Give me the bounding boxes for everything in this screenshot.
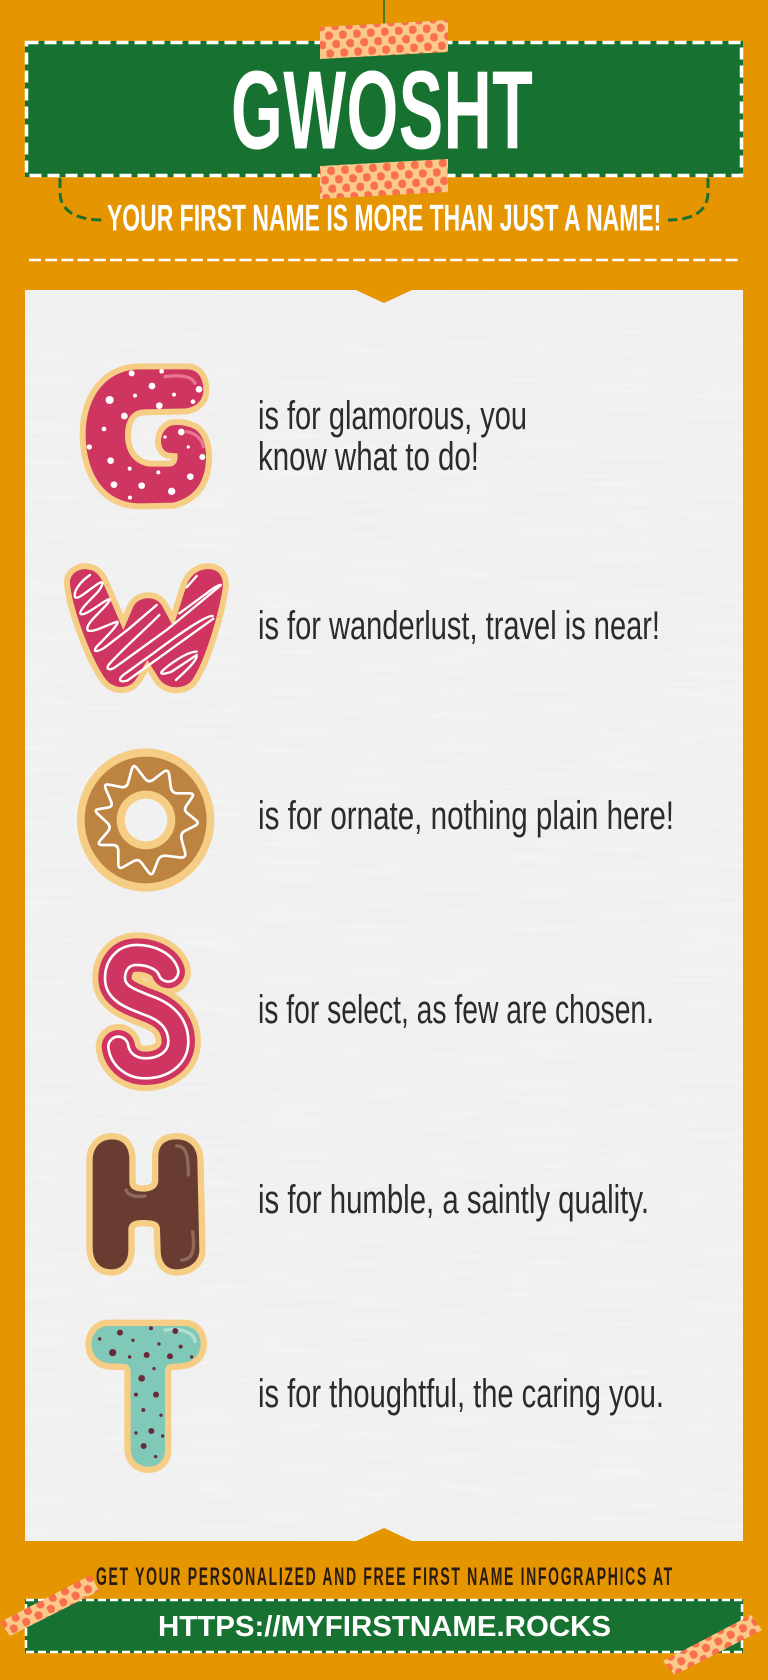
tape top — [320, 20, 448, 59]
url: HTTPS://MYFIRSTNAME.ROCKS — [158, 1611, 611, 1643]
icon: cookie letter O — [77, 748, 214, 892]
title: GWOSHT — [231, 49, 533, 173]
icon: cookie letter G — [86, 369, 206, 503]
header — [25, 0, 743, 239]
string line — [383, 0, 385, 26]
tape right — [663, 1615, 762, 1675]
text: G line: is for glamorous, you — [258, 394, 527, 438]
tape bottom — [320, 159, 448, 199]
url banner — [25, 1599, 743, 1653]
tape left — [0, 1575, 99, 1636]
footer — [0, 1564, 762, 1675]
subtitle: YOUR FIRST NAME IS MORE THAN JUST A NAME! — [107, 197, 661, 239]
icon: cookie letter W — [70, 569, 223, 687]
connector right — [668, 178, 708, 220]
title banner — [25, 41, 743, 177]
icon: cookie letter S — [115, 955, 178, 1068]
panel: letters — [25, 290, 743, 1541]
icon: cookie letter T — [92, 1326, 201, 1467]
footer call to action: GET YOUR PERSONALIZED AND FREE FIRST NAME INFOGRAPHICS AT — [96, 1564, 673, 1591]
text: G line: know what to do! — [258, 435, 479, 479]
connector left — [60, 178, 103, 220]
icon: cookie letter H — [93, 1139, 199, 1269]
divider — [29, 259, 739, 261]
paper — [25, 290, 743, 1541]
